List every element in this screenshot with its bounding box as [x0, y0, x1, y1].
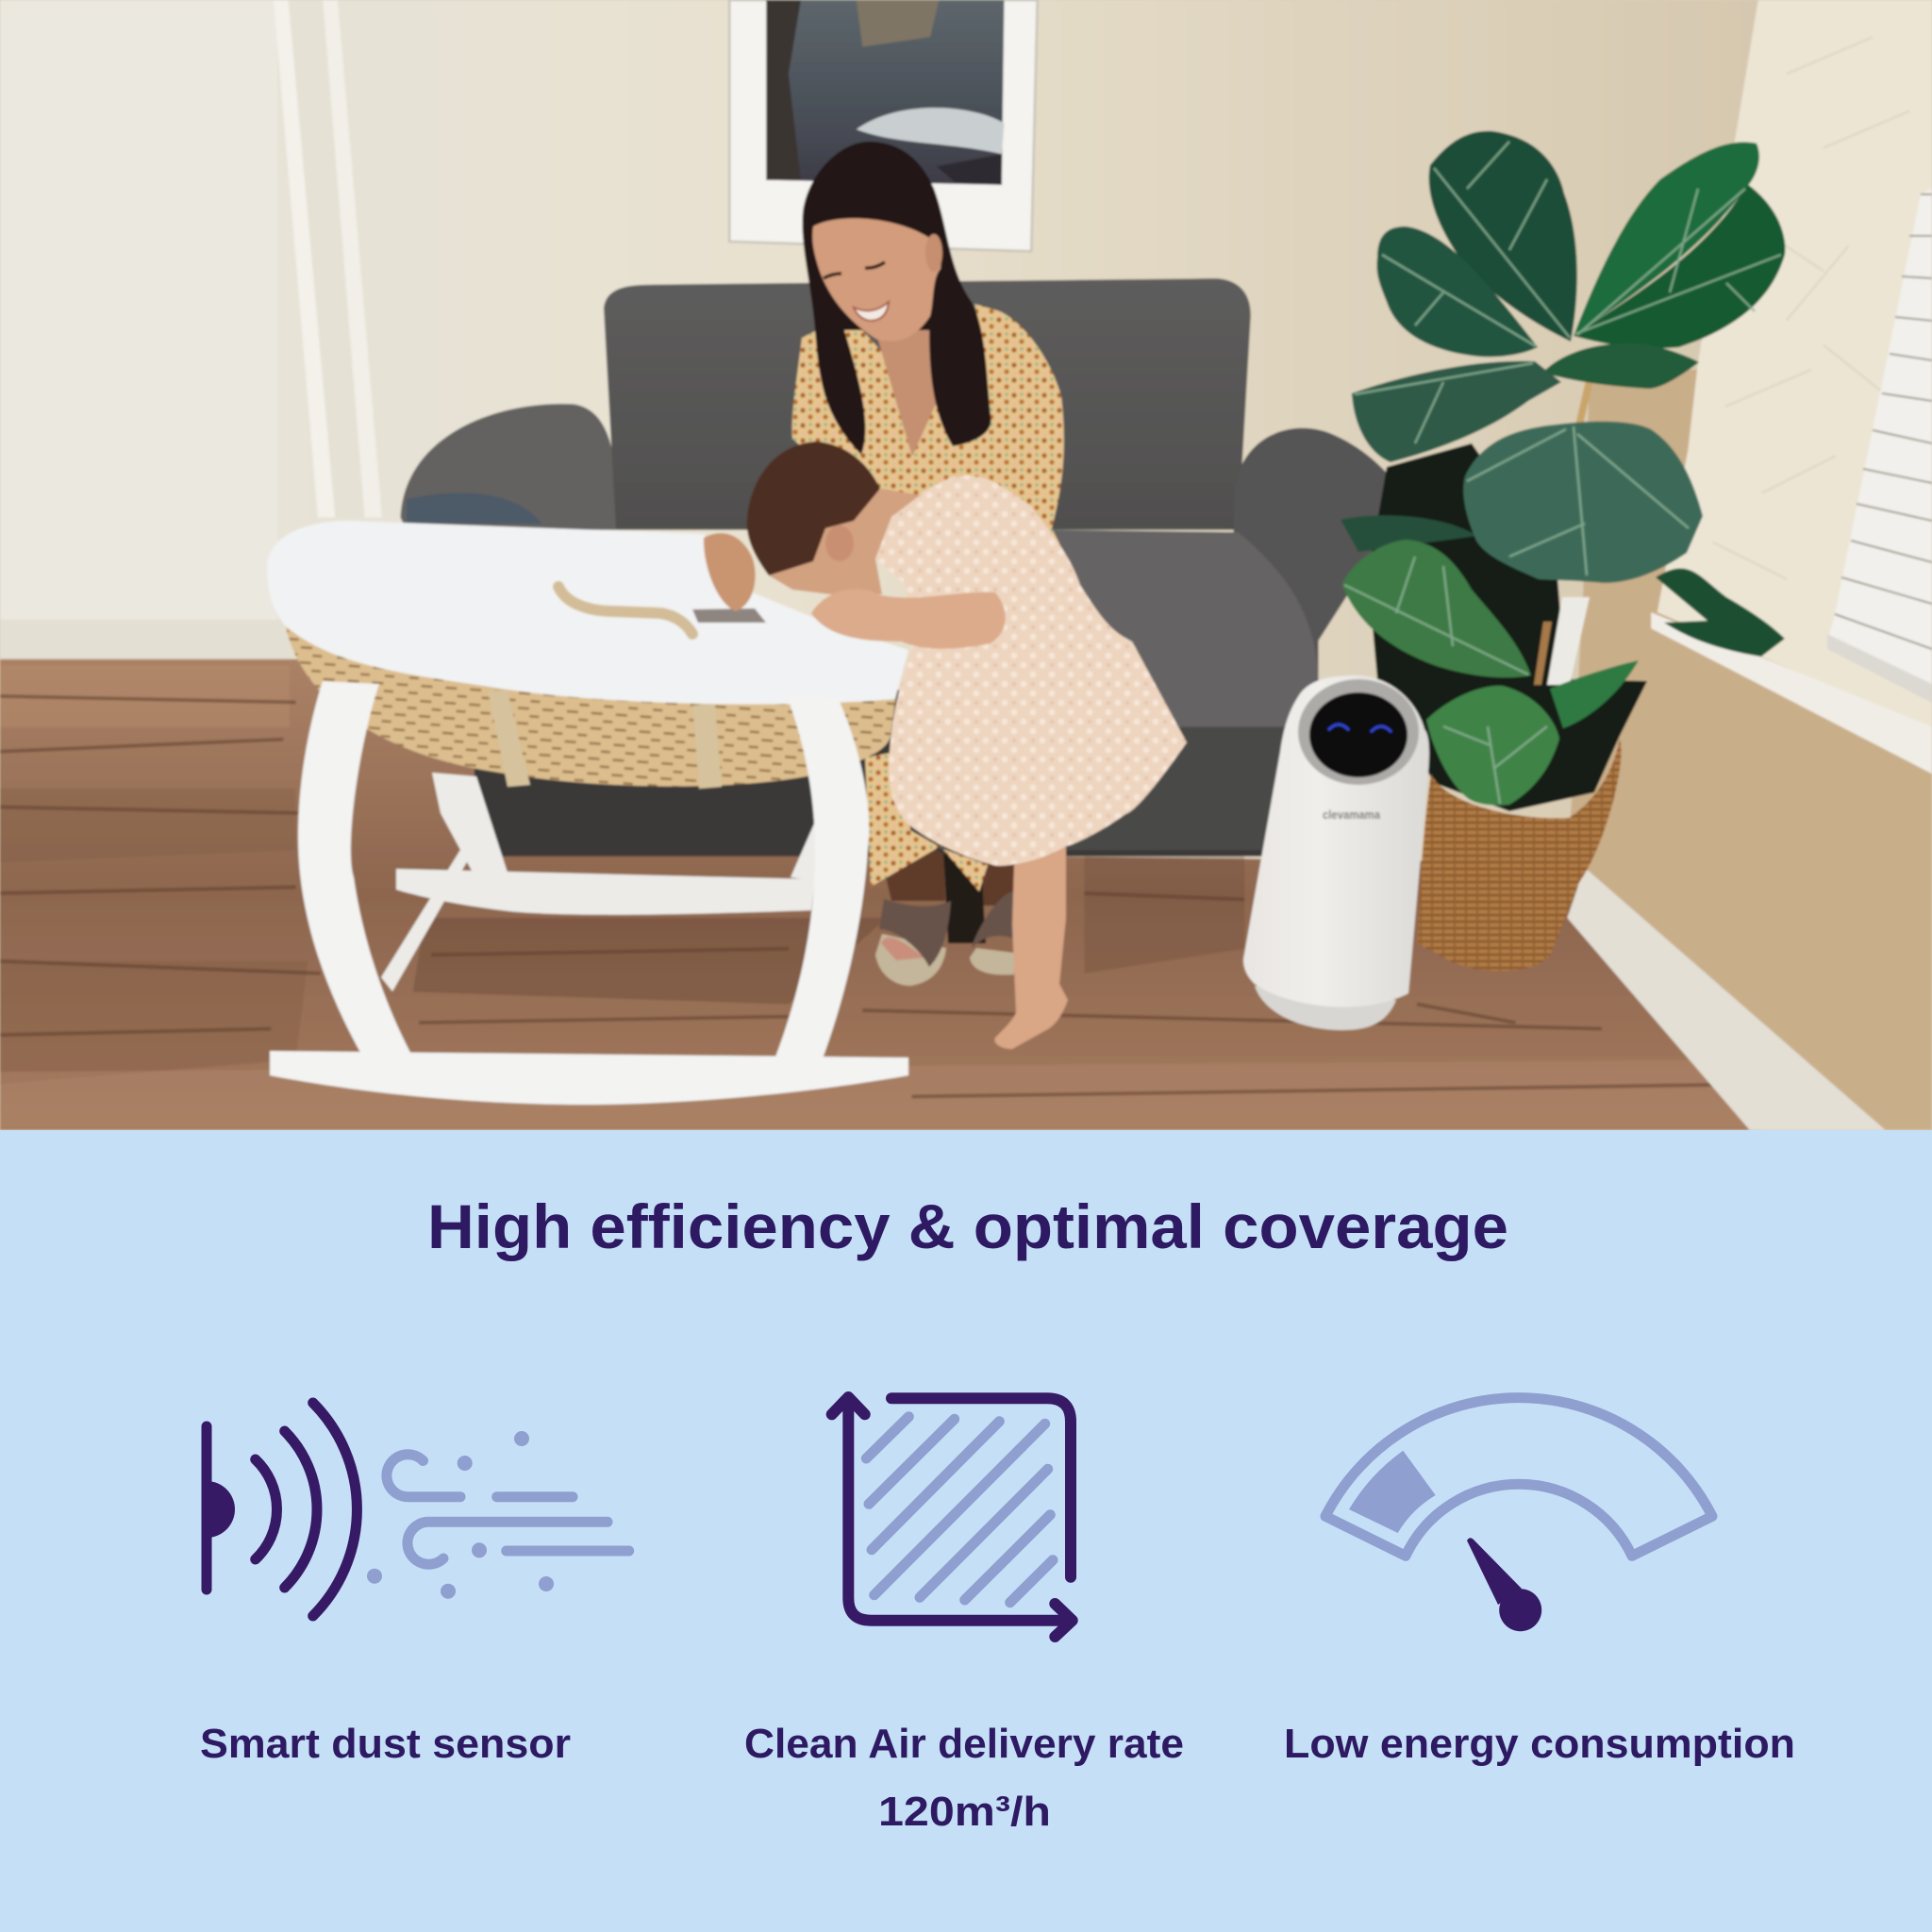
leaf by planter [1426, 686, 1559, 806]
wicker planter basket [1418, 739, 1622, 971]
air purifier [1243, 675, 1429, 1030]
purifier dark window [1309, 692, 1407, 777]
heading: High efficiency & optimal coverage [427, 1191, 1508, 1261]
left baseboard [0, 620, 295, 660]
bassinet stand front [270, 681, 908, 1105]
leaf veins [1344, 142, 1781, 804]
bassinet white cover [267, 521, 908, 705]
window sill [1651, 612, 1932, 774]
sound waves [256, 1403, 357, 1616]
floor [0, 659, 1762, 1130]
mother's hand [704, 533, 756, 611]
leaf left upper [1376, 226, 1538, 357]
air streams [387, 1455, 629, 1564]
ear [925, 234, 942, 272]
gauge filled segment [1349, 1451, 1436, 1533]
face [812, 218, 941, 341]
lower skirt [865, 750, 988, 891]
label: clean air delivery rate: Clean Air delivery rate [744, 1721, 1184, 1767]
mother [792, 142, 1071, 986]
bassinet straps [488, 691, 722, 789]
leaf top centre [1429, 131, 1577, 341]
baby blanket [692, 608, 766, 623]
arrows and frame [832, 1397, 1073, 1637]
purifier logo: clevamama [1323, 808, 1381, 822]
label: low energy consumption: Low energy consumption [1284, 1721, 1795, 1767]
floral dress [792, 304, 1071, 566]
icon: smart dust sensor [207, 1403, 629, 1616]
back wall [0, 0, 1774, 937]
bassinet stand back [381, 773, 823, 991]
standing leg [994, 846, 1068, 1049]
leaf drooping right [1656, 568, 1785, 657]
leaf right upper [1574, 142, 1759, 336]
leaf left strip [1341, 515, 1477, 552]
mother legs [873, 821, 1017, 906]
label: clean air delivery rate: 120m³/h [878, 1789, 1051, 1835]
diagonal hatching [866, 1417, 1053, 1603]
hair [803, 142, 991, 455]
toddler arm [811, 589, 1006, 649]
sofa [400, 278, 1405, 857]
white pole [1547, 597, 1590, 685]
baseboard [1567, 867, 1885, 1130]
photo backing [0, 0, 1932, 1141]
plant stems [1574, 380, 1593, 429]
leaf by planter right [1550, 660, 1639, 728]
purifier blue lights [1328, 724, 1391, 732]
photo: mother and toddler with bassinet and air purifier [0, 0, 1932, 1130]
dark foliage behind [1368, 443, 1647, 811]
toddler [747, 441, 1187, 1049]
leaf small middle [1542, 343, 1699, 389]
fiddle leaf plant [1341, 131, 1785, 811]
leaf centre large [1463, 422, 1703, 583]
window blinds [1827, 189, 1932, 703]
icon: low energy gauge [1325, 1398, 1712, 1631]
gauge needle [1467, 1538, 1541, 1631]
eyes [824, 262, 885, 278]
purifier body [1243, 675, 1429, 1008]
leaf lower left [1342, 540, 1531, 677]
purifier base [1255, 986, 1396, 1030]
wall moulding [0, 0, 382, 623]
dust particles [367, 1431, 554, 1599]
purifier ring [1298, 679, 1419, 785]
sandal right [970, 891, 1014, 974]
framed picture [729, 0, 1038, 251]
icon: clean air delivery rate square [832, 1397, 1073, 1637]
leaf left middle [1352, 361, 1561, 462]
neck skin [769, 489, 920, 594]
label: smart dust sensor: Smart dust sensor [200, 1721, 571, 1767]
toddler ear [825, 525, 854, 561]
textured white wall [1657, 0, 1932, 729]
shadow between sandals [943, 854, 986, 943]
bassinet wicker basket [286, 627, 896, 787]
right wall with window [1567, 0, 1932, 1130]
sandal left [875, 899, 951, 986]
bassinet rope handle [558, 587, 692, 634]
panel: blue feature background [0, 1130, 1932, 1932]
tan lower wall [1567, 370, 1932, 1130]
toddler hair [747, 441, 880, 575]
leaf right large [1574, 184, 1785, 348]
neck and chest [873, 311, 937, 457]
sensor emitter [207, 1426, 235, 1590]
label: clean air delivery rate [744, 1721, 1184, 1835]
gauge outline [1325, 1398, 1712, 1556]
smile [854, 302, 889, 321]
seersucker dress [875, 475, 1187, 866]
